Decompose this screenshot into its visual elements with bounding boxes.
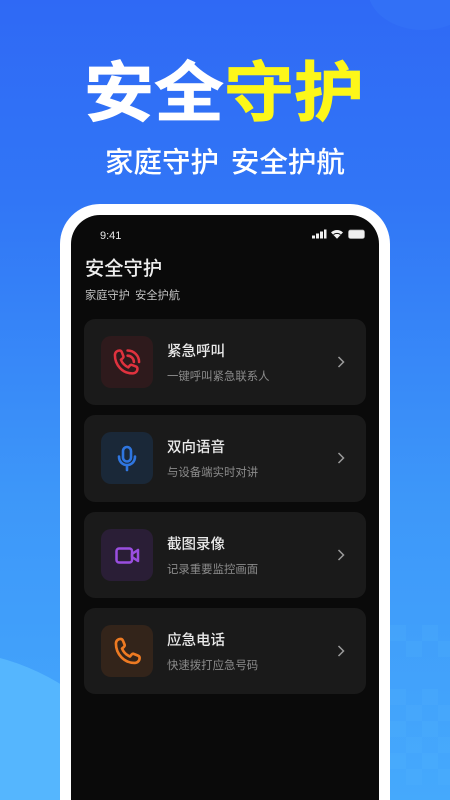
title: 紧急呼叫 bbox=[167, 344, 225, 360]
hero title: 安全守护 bbox=[84, 57, 364, 129]
title: 双向语音 bbox=[167, 440, 225, 456]
background decorations bbox=[0, 658, 60, 800]
status bar time: 9:41 bbox=[100, 230, 121, 242]
description: 快速拨打应急号码 bbox=[167, 660, 258, 672]
description: 记录重要监控画面 bbox=[167, 564, 258, 576]
hero subtitle: 家庭守护 安全护航 bbox=[105, 147, 345, 179]
panel: two-way voice bbox=[84, 415, 366, 502]
screen heading: 安全守护 bbox=[85, 259, 162, 280]
phone screen bbox=[71, 215, 379, 800]
icon: phone bbox=[101, 625, 153, 677]
icon: video camera bbox=[101, 529, 153, 581]
panel: emergency call bbox=[84, 319, 366, 405]
chevron bbox=[338, 550, 344, 560]
icon: ringing phone bbox=[101, 336, 153, 388]
status bar icons bbox=[312, 230, 365, 239]
title: 截图录像 bbox=[167, 537, 225, 553]
phone frame bbox=[60, 204, 390, 800]
chevron bbox=[338, 356, 344, 368]
panel: emergency phone bbox=[84, 608, 366, 694]
chevron bbox=[338, 646, 344, 656]
title: 应急电话 bbox=[167, 633, 225, 649]
icon: microphone bbox=[101, 432, 153, 484]
chevron bbox=[338, 452, 344, 464]
panel: screenshot and recording bbox=[84, 512, 366, 598]
description: 一键呼叫紧急联系人 bbox=[167, 371, 270, 383]
screen subheading: 家庭守护 安全护航 bbox=[85, 290, 180, 302]
description: 与设备端实时对讲 bbox=[167, 467, 258, 479]
